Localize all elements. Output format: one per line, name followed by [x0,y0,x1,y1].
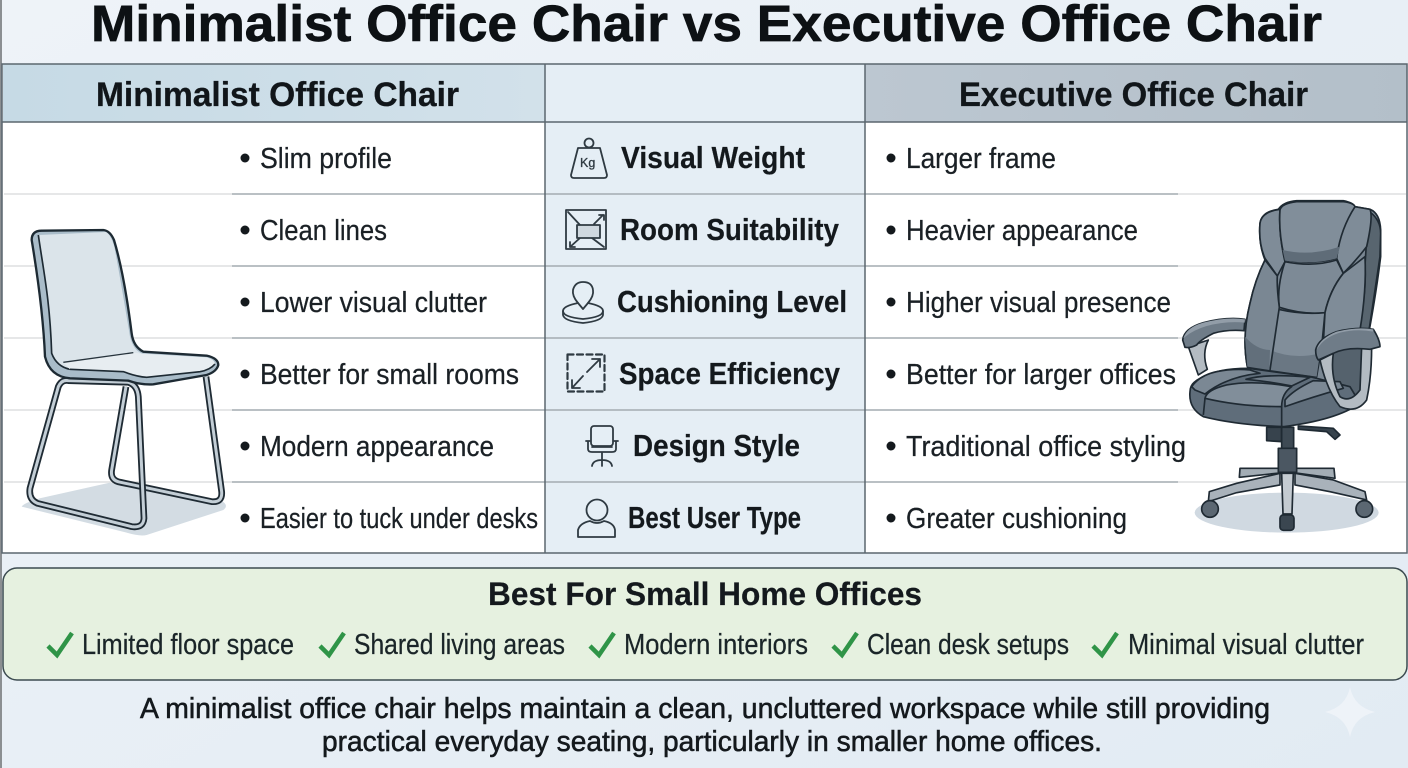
criterion: visual weight: Visual Weight [621,140,805,175]
criterion: space efficiency: Space Efficiency [619,356,841,391]
left column list [240,143,538,535]
panel heading: Best For Small Home Offices [488,576,922,612]
right column list: Better for larger offices [906,359,1176,391]
icon: room with arrows [566,210,606,249]
left column list: Lower visual clutter [260,287,487,319]
criterion: cushioning level [563,282,847,323]
criterion: visual weight [571,138,805,178]
summary text [140,693,1270,758]
icon: dashed expand square [568,354,604,392]
left column list: Modern appearance [260,431,494,463]
icon: kg weight [571,138,607,178]
criterion: room suitability: Room Suitability [620,212,840,247]
criterion: room suitability [566,210,840,249]
comparison table [2,64,1408,553]
criterion: design style [586,426,800,466]
summary text: practical everyday seating, particularly in smaller home offices. [322,726,1102,758]
illustration: executive chair [1183,201,1381,533]
right column list: Greater cushioning [906,503,1127,535]
left column list: Slim profile [260,143,392,175]
item: shared living areas: Shared living areas [354,629,565,661]
right column header: Executive Office Chair [959,76,1308,114]
criterion: best user type: Best User Type [628,500,801,535]
icon: desk chair [586,426,618,466]
left column list: Clean lines [260,215,387,247]
right column list: Higher visual presence [906,287,1171,319]
right column list: Heavier appearance [906,215,1138,247]
illustration: minimalist chair [22,230,226,535]
summary text: A minimalist office chair helps maintain a clean, uncluttered workspace while still providing [140,693,1270,725]
item: limited floor space: Limited floor space [82,629,294,661]
left column list: Easier to tuck under desks [260,503,538,535]
right column header [865,64,1407,122]
left column header [3,64,545,122]
criterion: design style: Design Style [633,428,800,463]
right column list: Traditional office styling [906,431,1186,463]
right column list: Larger frame [906,143,1056,175]
left column header: Minimalist Office Chair [96,76,459,114]
item: modern interiors: Modern interiors [624,629,808,661]
criterion: cushioning level: Cushioning Level [617,284,847,319]
criterion: best user type [578,500,801,537]
icon: user [578,500,615,537]
icon: sparkle watermark [1325,687,1375,737]
icon: person on cushion [563,282,603,323]
left column list: Better for small rooms [260,359,519,391]
item: clean desk setups: Clean desk setups [867,629,1069,661]
right column list [886,143,1186,535]
item: minimal visual clutter: Minimal visual clutter [1128,629,1364,661]
icon: kg weight: Kg [580,156,595,170]
panel: best for small home offices [3,568,1407,680]
